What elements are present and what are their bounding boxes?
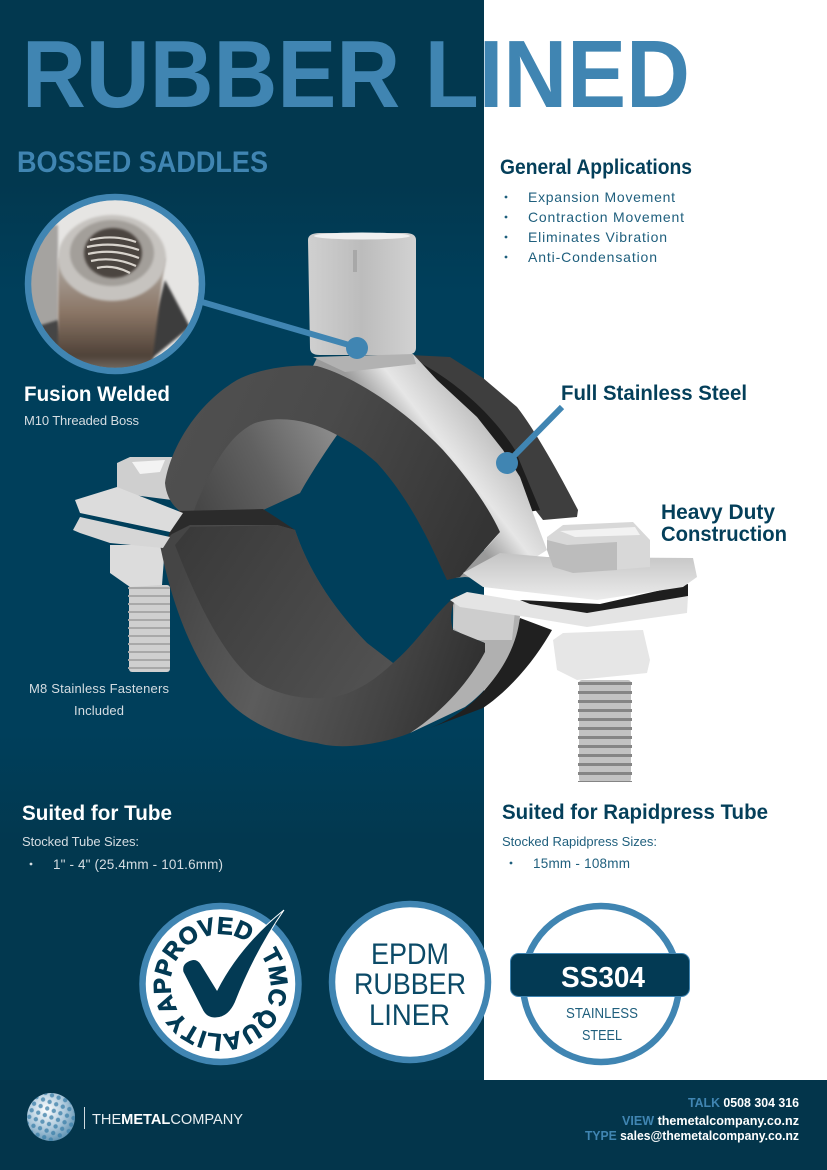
title: RUBBER LINED: [22, 21, 690, 128]
label: full stainless steel: Full Stainless Steel: [561, 382, 747, 405]
badge: EPDM rubber liner: EPDM: [371, 938, 449, 971]
navy left panel: [0, 0, 484, 1080]
applications list: Contraction Movement: [528, 209, 684, 225]
curved badge text: [154, 916, 288, 1052]
upper rubber liner: [165, 366, 500, 580]
panel: suited for rapidpress tube: Suited for Rapidpress Tube: [502, 801, 768, 824]
right hex bolt head: [547, 522, 650, 573]
threaded boss: [308, 232, 416, 372]
footer contact details: VIEW themetalcompany.co.nz: [622, 1114, 799, 1128]
heading: general applications: General Applications: [500, 156, 692, 179]
lower right steel band and gasket: [410, 598, 552, 733]
panel: suited for rapidpress tube: 15mm - 108mm: [533, 856, 630, 871]
panel: suited for rapidpress tube: Stocked Rapidpress Sizes:: [502, 834, 657, 849]
right lower nut: [553, 630, 650, 680]
right threaded bolt: [579, 680, 631, 782]
panel: suited for rapidpress tube: [502, 801, 768, 871]
badge: EPDM rubber liner: RUBBER: [354, 968, 466, 1001]
leader dot: [346, 337, 368, 359]
inset photo: [31, 200, 199, 368]
check mark: [183, 910, 284, 1018]
badge: SS304 stainless steel: SS304: [561, 962, 645, 994]
label: fusion welded: [24, 383, 170, 428]
applications list: Eliminates Vibration: [528, 229, 667, 245]
footer band: [0, 1080, 827, 1170]
inset ring: [28, 197, 202, 371]
label: fusion welded: Fusion Welded: [24, 383, 170, 406]
curved badge text: TMC: [263, 946, 288, 1006]
applications list: Expansion Movement: [528, 189, 675, 205]
footer contact details: TYPE sales@themetalcompany.co.nz: [585, 1129, 799, 1143]
footer contact details: TALK 0508 304 316: [688, 1096, 799, 1110]
label: fusion welded: M10 Threaded Boss: [24, 413, 140, 428]
label: heavy duty construction: Heavy Duty: [661, 501, 775, 524]
curved badge text: APPROVED: [154, 916, 252, 1010]
callout: full stainless steel leader: [496, 407, 562, 474]
label: m8 fasteners: Included: [74, 703, 124, 718]
badge: EPDM rubber liner: LINER: [369, 999, 450, 1032]
badge: SS304 stainless steel: [510, 906, 690, 1062]
panel: suited for tube: 1" - 4" (25.4mm - 101.6mm): [53, 857, 223, 872]
curved badge text: QUALITY: [165, 1010, 276, 1052]
stainless steel band: [313, 354, 547, 580]
subtitle: BOSSED SADDLES: [17, 146, 268, 179]
badge: EPDM rubber liner: [332, 904, 488, 1060]
product photo: rubber lined saddle clamp: [73, 232, 697, 782]
badge: approved TMC quality: [139, 902, 302, 1066]
left washer plates: [73, 487, 183, 548]
footer contact details: [585, 1096, 799, 1143]
badge: SS304 stainless steel: STAINLESS: [566, 1006, 638, 1022]
panel: suited for tube: [22, 802, 223, 872]
callout: inset photo of threaded boss: [25, 195, 368, 380]
label: m8 fasteners: [29, 681, 170, 718]
right flange plates: [450, 553, 697, 627]
back rubber strip: [410, 355, 578, 520]
leader line: [202, 302, 356, 347]
applications list: Anti-Condensation: [528, 249, 657, 265]
panel: general applications: [500, 156, 692, 265]
panel: suited for tube: Stocked Tube Sizes:: [22, 834, 139, 849]
footer logo: the metal company: THEMETALCOMPANY: [92, 1111, 243, 1128]
label: m8 fasteners: M8 Stainless Fasteners: [29, 681, 170, 696]
badge: SS304 stainless steel: STEEL: [582, 1028, 622, 1044]
panel: suited for tube: Suited for Tube: [22, 802, 172, 825]
lower rubber liner: [160, 525, 485, 746]
left bolt and nut behind liner: [110, 457, 172, 672]
label: heavy duty construction: Construction: [661, 523, 787, 546]
footer logo: the metal company: [27, 1093, 243, 1141]
icon: globe: [27, 1093, 75, 1141]
rubber junction shadow: [165, 509, 295, 545]
applications list: [505, 189, 684, 265]
label: heavy duty construction: [661, 501, 787, 546]
